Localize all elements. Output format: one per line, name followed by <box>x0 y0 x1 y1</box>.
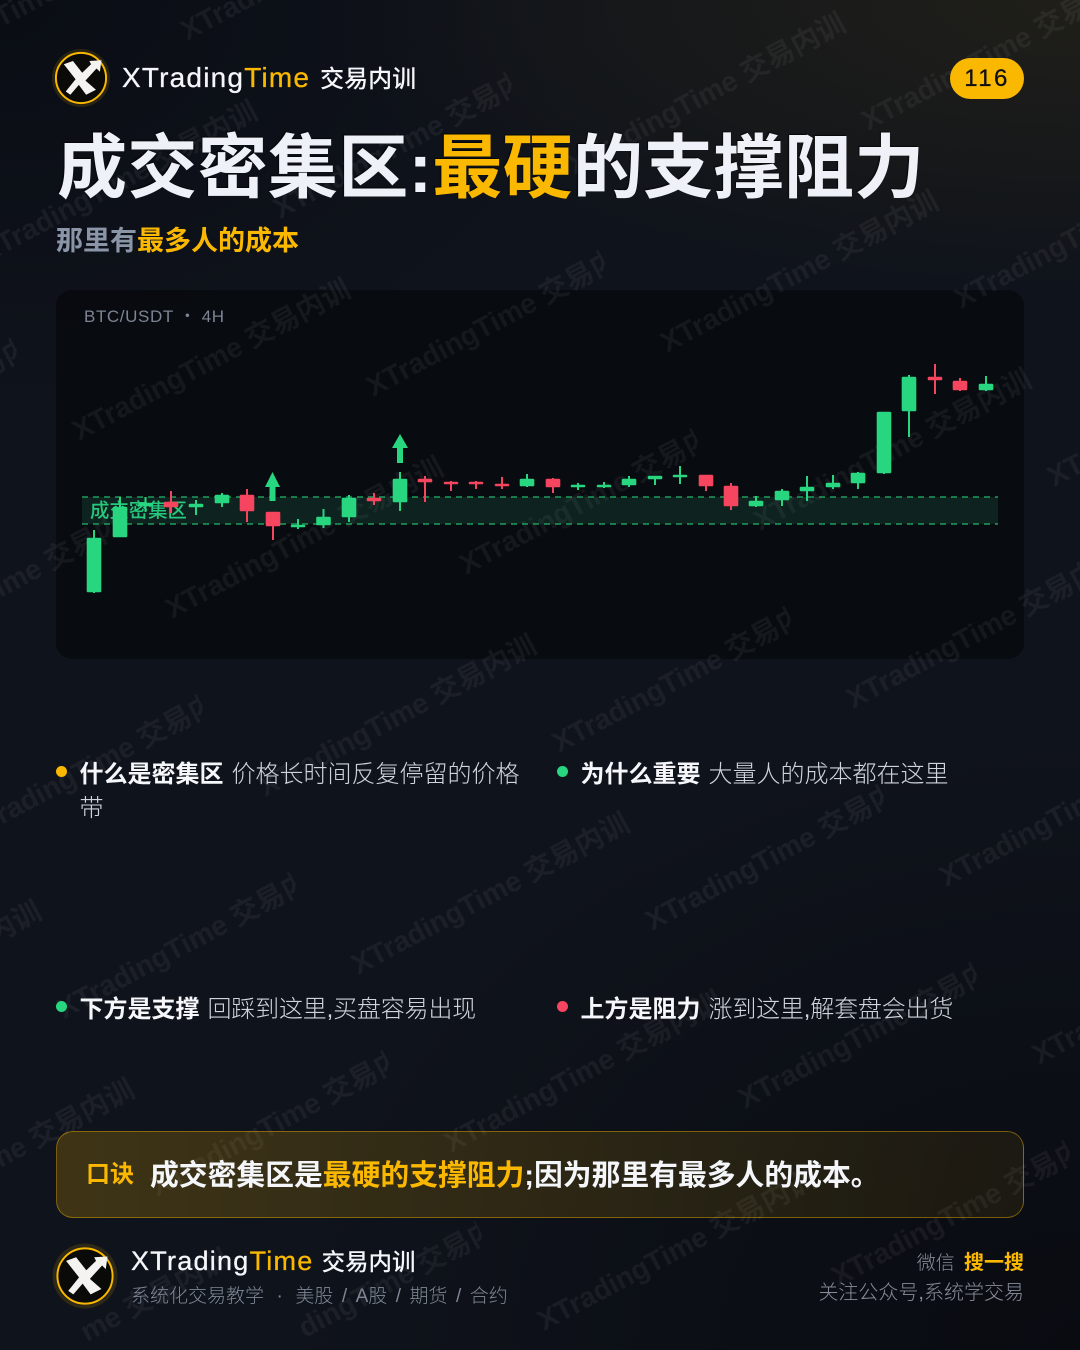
arrow: signal one <box>265 472 280 501</box>
background watermark: XTradingTime 交易内训 <box>253 629 542 803</box>
footer tagline: 系统化交易教学 · 美股 / A股 / 期货 / 合约 <box>131 1286 508 1307</box>
background watermark: XTradingTime 交易内训 <box>733 941 1022 1115</box>
background watermark: XTradingTime 交易内训 <box>52 851 341 1025</box>
panel: chart <box>56 290 1024 659</box>
background watermark: XTradingTime 交易内训 <box>562 7 851 181</box>
background watermark: XTradingTime 交易内训 <box>640 763 929 937</box>
icon: header logo <box>52 49 110 107</box>
chart pair label: BTC/USDT ・ 4H <box>84 307 225 326</box>
subtitle: 那里有最多人的成本 <box>56 226 299 256</box>
background watermark: XTradingTime 交易内训 <box>160 451 449 625</box>
icon: footer logo <box>52 1244 118 1308</box>
background watermark: XTradingTime 交易内训 <box>454 407 743 581</box>
callout label: 口诀 <box>86 1161 134 1188</box>
footer search call: 微信 搜一搜 <box>917 1252 1024 1274</box>
callout: mnemonic <box>56 1131 1024 1218</box>
zone label: 成交密集区 <box>90 500 187 522</box>
background watermark: XTradingTime 交易内训 <box>67 273 356 447</box>
issue number badge: 116 <box>964 65 1010 92</box>
bullet: 上方是阻力: 上方是阻力 涨到这里,解套盘会出货 <box>580 996 953 1023</box>
background watermark: dingTime 交易内训 <box>293 1199 527 1344</box>
background watermark: XTradingTime 交易内训 <box>547 585 836 759</box>
background watermark: XTradingTime 交易内训 <box>361 229 650 403</box>
background watermark: me 交易内训 <box>75 1243 234 1348</box>
bullet: 什么是密集区 <box>56 761 520 822</box>
footer follow text: 关注公众号,系统学交易 <box>818 1282 1024 1304</box>
bullet: 为什么重要: 为什么重要 大量人的成本都在这里 <box>580 761 948 788</box>
background watermark: XTradingTime 交易内训 <box>145 1029 434 1203</box>
callout text: 成交密集区是最硬的支撑阻力;因为那里有最多人的成本。 <box>150 1160 880 1192</box>
background watermark: XTradingTime 交易内训 <box>532 1163 821 1337</box>
arrow: signal two <box>392 434 408 463</box>
background watermark: XTradingTime 交易内训 <box>655 185 944 359</box>
bullet: 什么是密集区: 什么是密集区 价格长时间反复停留的价格 <box>80 761 520 788</box>
bullet: 什么是密集区: 带 <box>80 795 104 822</box>
title: 成交密集区:最硬的支撑阻力 <box>57 129 925 207</box>
brand name: XTradingTime 交易内训 <box>122 62 416 93</box>
issue number badge <box>950 58 1024 99</box>
footer brand name: XTradingTime 交易内训 <box>131 1246 416 1276</box>
background watermark: XTradingTime 交易内训 <box>748 363 1037 537</box>
background watermark: XTradingTime 交易内训 <box>346 807 635 981</box>
background watermark: XTradingTime 交易内训 <box>439 985 728 1159</box>
bullet: 下方是支撑: 下方是支撑 回踩到这里,买盘容易出现 <box>80 996 476 1023</box>
background watermark: XTradingTime 交易内训 <box>268 51 557 225</box>
